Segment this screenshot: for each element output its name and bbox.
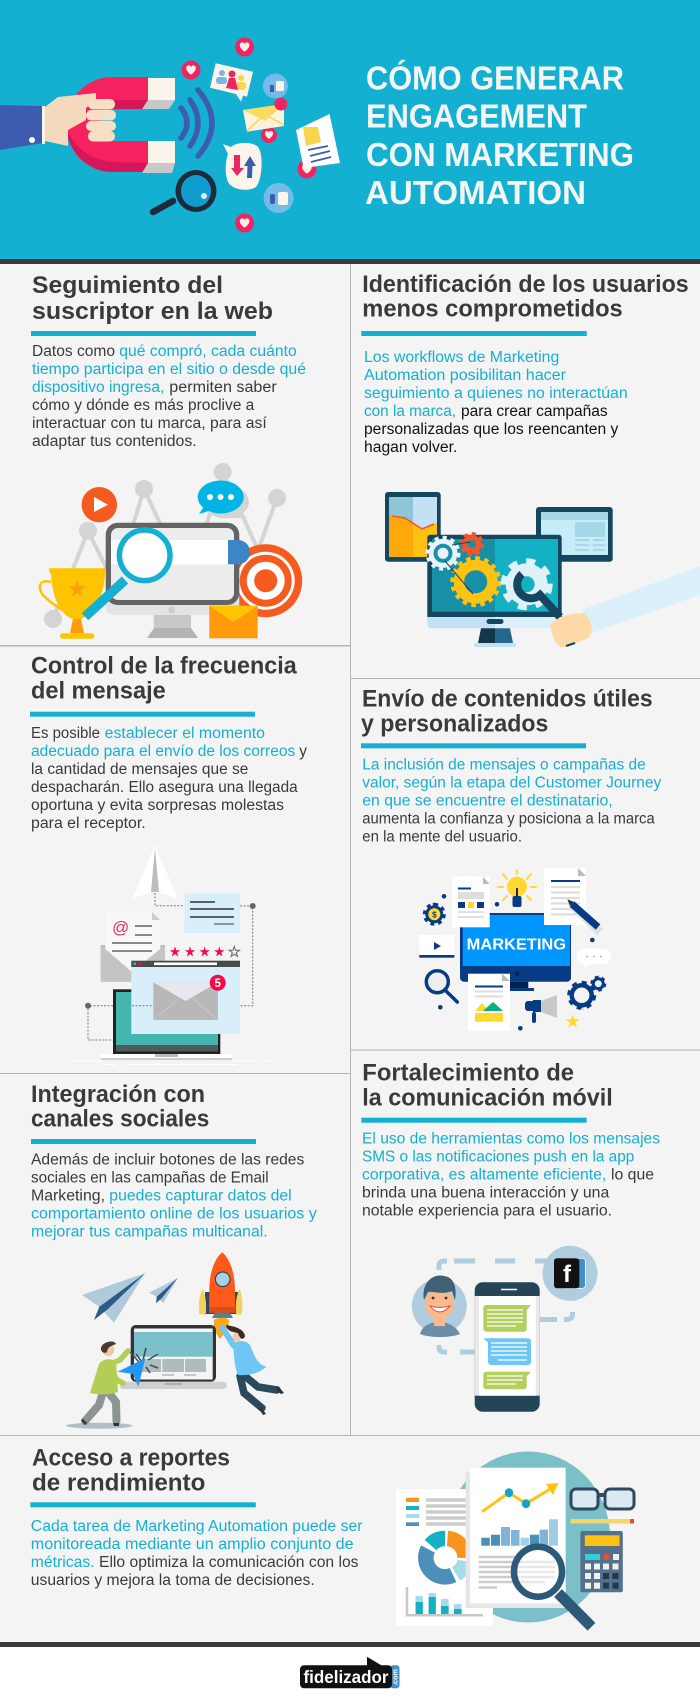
- icon: magnifier: [153, 170, 216, 212]
- icon: people bubble: [210, 63, 253, 102]
- body text: comportamiento online de los usuarios y: [31, 1206, 317, 1223]
- panel: envío de contenidos: [361, 686, 662, 1031]
- body text: personalizadas que los reencanten y: [364, 421, 619, 438]
- logo: fidelizador: fidelizador: [304, 1667, 389, 1687]
- title: ENGAGEMENT: [366, 99, 587, 136]
- body text: Ello optimiza la comunicación con los: [99, 1554, 359, 1571]
- body text: la cantidad de mensajes que se: [31, 761, 248, 778]
- body text: Automation posibilitan hacer: [364, 367, 566, 384]
- heading: Fortalecimiento de: [362, 1060, 574, 1087]
- panel: fortalecimiento de la comunicación móvil: [361, 1060, 660, 1412]
- icon: hearts: [182, 38, 316, 232]
- body text: [364, 349, 628, 456]
- heading: [361, 686, 653, 738]
- body text: valor, según la etapa del Customer Journey: [362, 774, 662, 791]
- body text: métricas.: [31, 1554, 95, 1571]
- heading: Control de la frecuencia: [31, 652, 297, 679]
- body text: permiten saber: [169, 379, 277, 396]
- body text: adaptar tus contenidos.: [32, 433, 197, 450]
- icon: arrows bubble: [223, 143, 262, 190]
- panel: seguimiento del suscriptor: [31, 272, 306, 639]
- illustration: email flow: [70, 845, 270, 1064]
- body text: adecuado para el envío de los correos: [31, 743, 296, 760]
- body text: con la marca,: [364, 403, 456, 420]
- heading: y personalizados: [361, 711, 548, 738]
- illustration: devices with gears: [385, 492, 700, 647]
- body text: puedes capturar datos del: [109, 1188, 292, 1205]
- body text: brinda una buena interacción y una: [362, 1184, 610, 1201]
- illustration: marketing monitor: [419, 868, 611, 1031]
- heading: de rendimiento: [32, 1470, 205, 1497]
- body text: monitoreada mediante un amplio conjunto de: [31, 1536, 354, 1553]
- body text: [31, 725, 307, 832]
- body text: El uso de herramientas como los mensajes: [362, 1130, 660, 1147]
- panel: identificación de usuarios: [361, 271, 700, 647]
- icon: thumbs up: [263, 74, 294, 213]
- title: AUTOMATION: [365, 175, 586, 212]
- body text: Los workflows de Marketing: [364, 349, 559, 366]
- body text: Datos como: [32, 343, 115, 360]
- heading: [31, 1081, 209, 1133]
- body text: [362, 1130, 660, 1219]
- body text: mejorar tus campañas multicanal.: [31, 1224, 268, 1241]
- heading: canales sociales: [31, 1106, 209, 1133]
- illustration: web analytics monitor: [40, 463, 302, 639]
- heading: Seguimiento del: [32, 272, 223, 299]
- body text: Además de incluir botones de las redes: [31, 1152, 305, 1169]
- panel dividers: [0, 264, 700, 1436]
- illustration: email flow: @: [112, 918, 129, 937]
- heading: Acceso a reportes: [32, 1444, 230, 1471]
- body text: para el receptor.: [31, 815, 146, 832]
- icon: magnet held by hand: [0, 77, 175, 173]
- header panel: [0, 0, 700, 264]
- heading: [32, 1444, 230, 1497]
- figure: man in green sweater: [66, 1342, 132, 1429]
- body text: hagan volver.: [364, 439, 457, 456]
- body text: despacharán. Ello asegura una llegada: [31, 779, 298, 796]
- heading: [31, 652, 297, 705]
- heading: Integración con: [31, 1081, 205, 1108]
- title: [365, 59, 634, 212]
- figure: woman in blue shirt: [222, 1325, 284, 1415]
- body text: usuarios y mejora la toma de decisiones.: [31, 1572, 315, 1589]
- panel: integración con canales sociales: [31, 1081, 317, 1429]
- body text: en la mente del usuario.: [362, 828, 522, 845]
- heading: suscriptor en la web: [32, 298, 273, 325]
- heading: del mensaje: [31, 678, 166, 705]
- heading: [362, 271, 689, 323]
- body text: dispositivo ingresa,: [32, 379, 164, 396]
- body text: [32, 343, 306, 450]
- illustration: reports and charts: [396, 1452, 634, 1627]
- body text: [31, 1152, 317, 1241]
- heading: [32, 272, 273, 325]
- body text: cómo y dónde es más proclive a: [32, 397, 255, 414]
- body text: y: [299, 743, 307, 760]
- body text: oportuna y evita sorpresas molestas: [31, 797, 284, 814]
- panel: control de la frecuencia: [30, 652, 307, 1064]
- body text: aumenta la confianza y posiciona a la marca: [362, 810, 655, 827]
- heading: la comunicación móvil: [362, 1084, 613, 1111]
- heading: menos comprometidos: [362, 296, 623, 323]
- heading: Envío de contenidos útiles: [362, 686, 653, 713]
- body text: [31, 1518, 362, 1589]
- logo: fidelizador: .com: [390, 1669, 400, 1686]
- body text: para crear campañas: [461, 403, 608, 420]
- body text: interactuar con tu marca, para así: [32, 415, 267, 432]
- illustration: team launching rocket: [66, 1252, 284, 1429]
- body text: qué compró, cada cuánto: [119, 343, 297, 360]
- title: CON MARKETING: [366, 137, 634, 174]
- icon: document: [296, 114, 340, 168]
- body text: SMS o las notificaciones push en la app: [362, 1148, 634, 1165]
- illustration: phone messaging: [412, 1246, 598, 1412]
- body text: [362, 756, 662, 845]
- body text: en que se encuentre el destinatario,: [362, 792, 613, 809]
- body text: sociales en las campañas de Email: [31, 1170, 269, 1187]
- body text: tiempo participa en el sitio o desde qué: [32, 361, 306, 378]
- icon: signal waves: [181, 90, 212, 156]
- logo: fidelizador: [300, 1657, 400, 1688]
- icon: envelope: [243, 98, 287, 132]
- title: CÓMO GENERAR: [366, 59, 624, 97]
- body text: establecer el momento: [105, 725, 265, 742]
- body text: corporativa, es altamente eficiente,: [362, 1166, 606, 1183]
- body text: lo que: [611, 1166, 654, 1183]
- footer bar: [0, 1642, 700, 1647]
- body text: Cada tarea de Marketing Automation puede ser: [31, 1518, 362, 1535]
- body text: Marketing,: [31, 1188, 105, 1205]
- illustration: email flow: 5: [214, 978, 221, 990]
- body text: seguimiento a quienes no interactúan: [364, 385, 628, 402]
- illustration: phone messaging: f: [563, 1261, 572, 1288]
- body text: notable experiencia para el usuario.: [362, 1202, 612, 1219]
- illustration: marketing monitor: $: [432, 910, 437, 920]
- body text: La inclusión de mensajes o campañas de: [362, 756, 646, 773]
- heading: [362, 1060, 613, 1111]
- heading: Identificación de los usuarios: [362, 271, 689, 298]
- panel: acceso a reportes: [30, 1444, 634, 1627]
- illustration: marketing monitor: MARKETING: [467, 936, 566, 953]
- body text: Es posible: [31, 725, 100, 742]
